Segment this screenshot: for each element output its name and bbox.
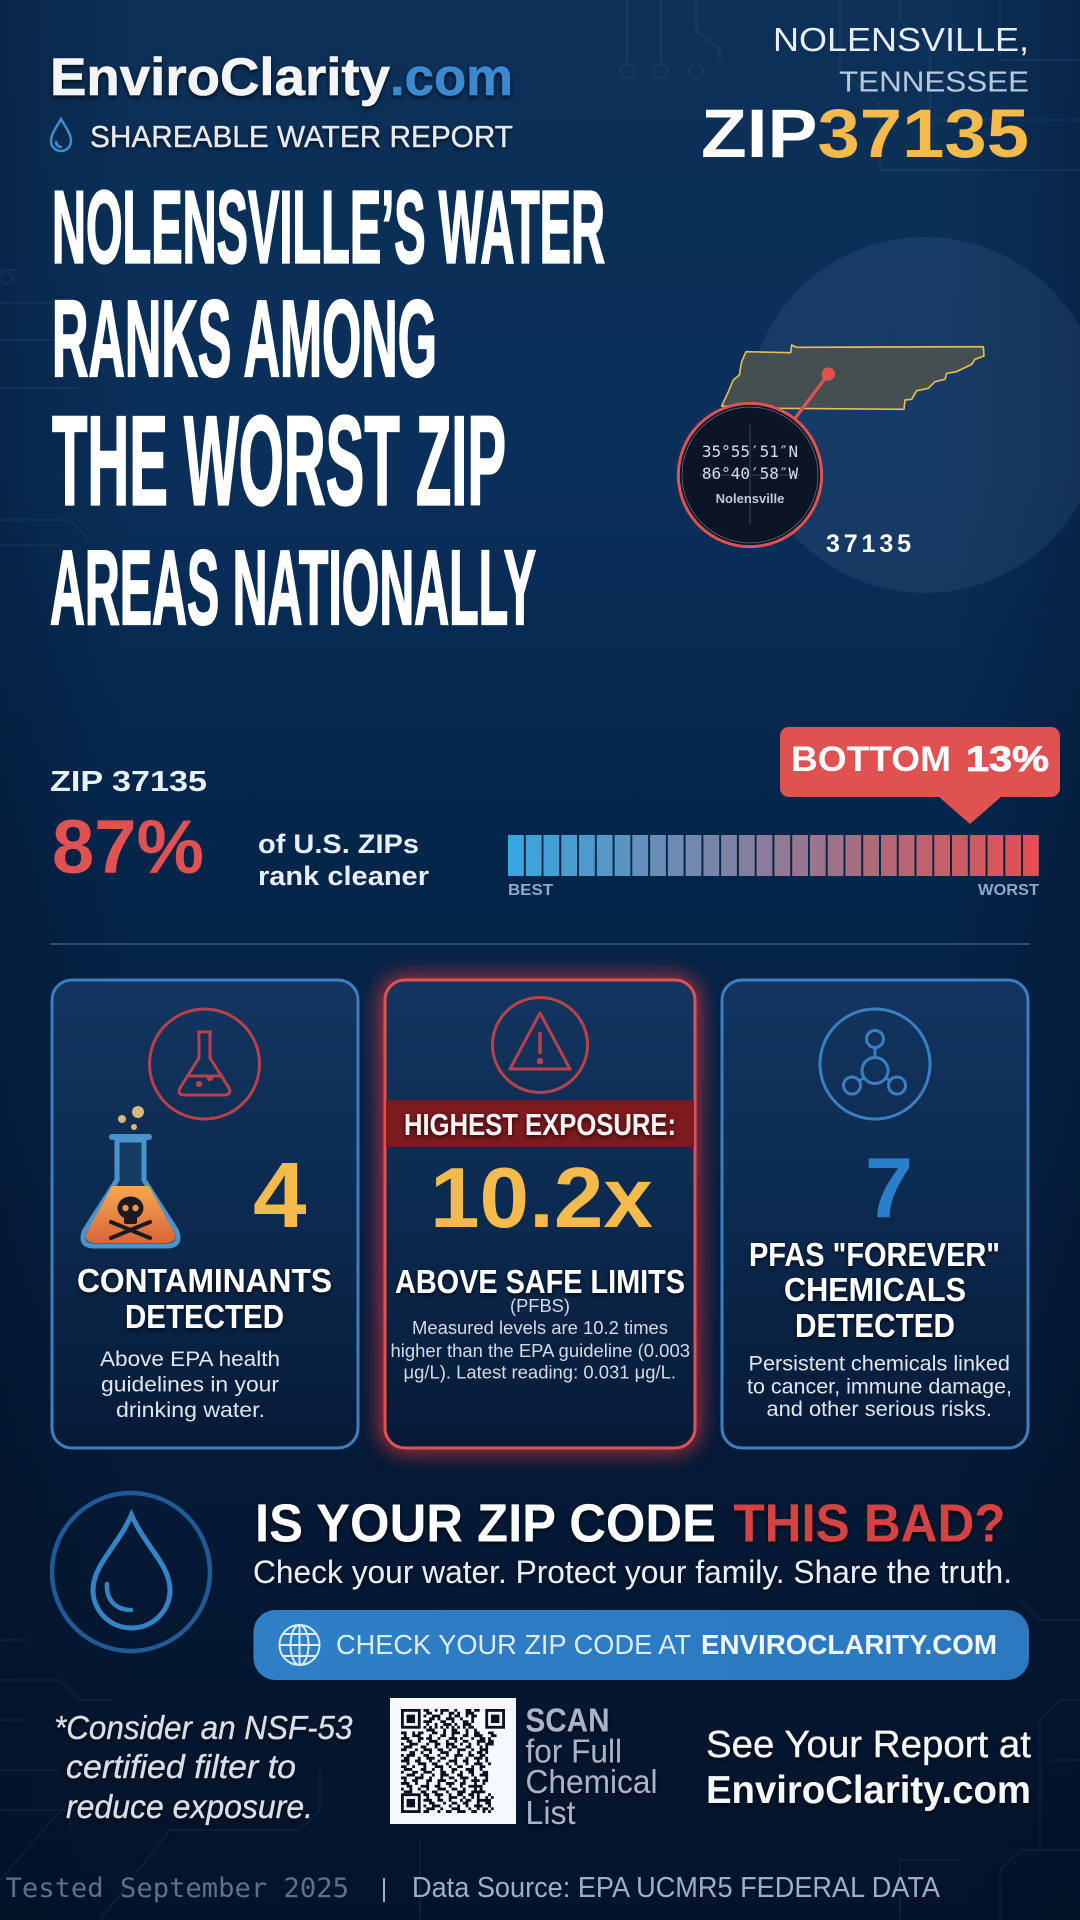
location heading: TENNESSEE — [839, 66, 1029, 98]
ranking stat: of U.S. ZIPs — [258, 829, 419, 859]
footer: source line: Tested September 2025 — [6, 1873, 349, 1904]
title: THE WORST ZIP — [52, 390, 506, 532]
callout: bottom 13% — [780, 727, 1060, 824]
scan label: List — [526, 1794, 576, 1831]
card body text: Above EPA health — [100, 1348, 280, 1371]
scan label — [526, 1702, 658, 1831]
subtitle text: SHAREABLE WATER REPORT — [90, 119, 513, 154]
location heading: ZIP — [701, 95, 818, 172]
rank bar chart: WORST — [978, 882, 1039, 899]
coordinate badge — [678, 403, 822, 547]
report link — [706, 1724, 1031, 1812]
button: check your zip: ENVIROCLARITY.COM — [701, 1629, 997, 1660]
icon: toxic flask — [83, 1106, 178, 1246]
card body text: and other serious risks. — [766, 1398, 992, 1421]
coordinates: Nolensville — [716, 491, 784, 506]
card heading — [749, 1236, 1000, 1344]
call to action heading — [255, 1494, 1006, 1554]
call to action heading: THIS BAD? — [734, 1494, 1006, 1554]
coordinates: 86°40′58″W — [702, 464, 799, 483]
icon: big water drop — [52, 1493, 210, 1651]
card body text — [747, 1352, 1012, 1421]
coordinates: 35°55′51″N — [702, 442, 798, 461]
call to action heading: IS YOUR ZIP CODE — [255, 1494, 716, 1554]
card body text: Measured levels are 10.2 times — [412, 1318, 668, 1338]
button: check your zip: CHECK YOUR ZIP CODE AT — [336, 1629, 691, 1660]
card body text: drinking water. — [116, 1399, 265, 1422]
coordinates — [702, 442, 799, 506]
location heading — [701, 21, 1029, 172]
card heading: ABOVE SAFE LIMITS — [395, 1263, 685, 1300]
scan label: Chemical — [526, 1763, 658, 1800]
panel: contaminants detected — [52, 980, 358, 1448]
scan label: SCAN — [526, 1702, 610, 1738]
footer: source line: Data Source: EPA UCMR5 FEDERAL DATA — [412, 1872, 941, 1904]
call to action subheading: Check your water. Protect your family. Share the truth. — [253, 1554, 1012, 1590]
rank bar chart: BEST — [508, 882, 553, 899]
logo: EnviroClarity.com: .com — [390, 48, 513, 107]
callout: bottom 13%: 13% — [966, 740, 1049, 779]
QR code — [390, 1698, 516, 1824]
callout: bottom 13%: BOTTOM — [791, 740, 951, 779]
card body text — [100, 1348, 280, 1422]
footer: source line — [6, 1872, 941, 1904]
icon: molecule — [820, 1009, 930, 1119]
panel: PFAS forever chemicals — [722, 980, 1028, 1448]
ranking stat — [50, 766, 430, 891]
card body text: μg/L). Latest reading: 0.031 μg/L. — [404, 1363, 676, 1383]
ranking stat: rank cleaner — [258, 861, 430, 891]
stat: 7: 7 — [865, 1141, 913, 1236]
report link: EnviroClarity.com — [706, 1769, 1031, 1812]
title: RANKS AMONG — [52, 278, 437, 400]
card heading: DETECTED — [125, 1298, 284, 1335]
map: Tennessee locator — [678, 237, 1080, 593]
card body text: guidelines in your — [101, 1374, 279, 1396]
card body text: higher than the EPA guideline (0.003 — [390, 1341, 690, 1361]
card heading: CONTAMINANTS — [77, 1262, 332, 1299]
filter note: certified filter to — [66, 1748, 296, 1785]
ranking stat: 87% — [52, 805, 204, 890]
stat: 10.2x: 10.2x — [430, 1151, 653, 1246]
card body text: to cancer, immune damage, — [747, 1376, 1012, 1398]
title — [50, 170, 605, 647]
card body text: (PFBS) — [510, 1296, 570, 1316]
panel: highest exposure: HIGHEST EXPOSURE: — [404, 1107, 676, 1142]
icon: flask in circle — [150, 1009, 260, 1119]
panel: highest exposure — [380, 976, 699, 1452]
filter note — [54, 1709, 353, 1825]
banner — [386, 1100, 694, 1147]
filter note: reduce exposure. — [66, 1788, 313, 1825]
stat: 4: 4 — [253, 1143, 307, 1247]
subtitle: shareable water report — [51, 119, 513, 154]
card body text — [390, 1296, 690, 1383]
location heading: NOLENSVILLE, — [773, 21, 1029, 58]
state outline — [722, 345, 984, 409]
location heading: 37135 — [818, 95, 1029, 172]
scan label: for Full — [526, 1732, 622, 1770]
card heading — [77, 1262, 332, 1335]
filter note: *Consider an NSF-53 — [54, 1709, 353, 1746]
logo: EnviroClarity.com: EnviroClarity — [50, 48, 391, 107]
icon: globe — [280, 1625, 320, 1665]
zip label: 37135 — [826, 530, 911, 558]
rank bar chart — [508, 835, 1039, 899]
button: check your zip — [254, 1610, 1029, 1680]
report link: See Your Report at — [706, 1724, 1031, 1766]
card body text: Persistent chemicals linked — [748, 1352, 1010, 1376]
card heading: DETECTED — [795, 1307, 955, 1344]
card heading: PFAS "FOREVER" — [749, 1236, 1000, 1273]
icon: water drop — [51, 119, 71, 151]
ranking stat: ZIP 37135 — [50, 766, 207, 798]
icon: warning triangle — [492, 998, 588, 1092]
pin — [795, 374, 828, 418]
card heading: CHEMICALS — [784, 1271, 966, 1308]
